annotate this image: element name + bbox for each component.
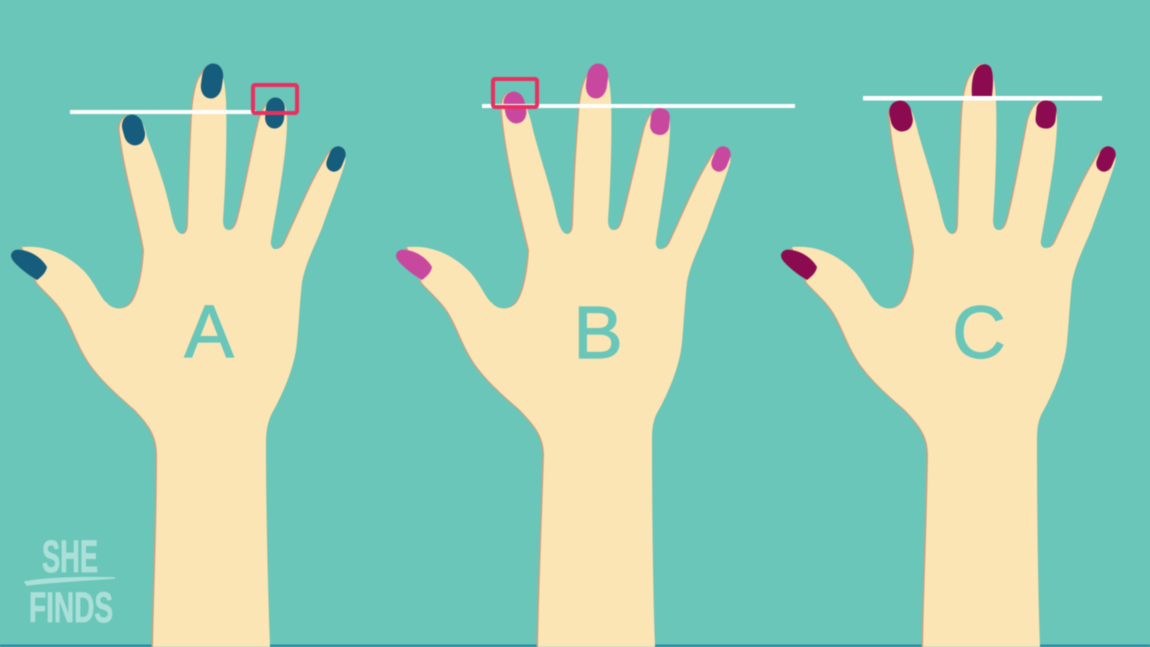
measuring line A [70, 110, 256, 114]
nails C [781, 64, 1118, 280]
highlight box B [493, 79, 537, 107]
logo: She Finds: FINDS [29, 584, 113, 632]
measuring line B [482, 104, 795, 108]
logo: She Finds: SHE [42, 531, 98, 582]
measuring line C [863, 96, 1102, 100]
nails A [11, 62, 348, 280]
logo: She Finds [25, 531, 115, 632]
letter C: C [952, 291, 1006, 374]
hand C [781, 64, 1118, 647]
bottom strip [0, 644, 1150, 647]
letter B: B [573, 291, 623, 374]
nails B [396, 62, 733, 280]
letter A: A [184, 290, 234, 373]
highlight box A [253, 85, 297, 113]
hand B [396, 62, 733, 647]
hand A [11, 62, 348, 647]
